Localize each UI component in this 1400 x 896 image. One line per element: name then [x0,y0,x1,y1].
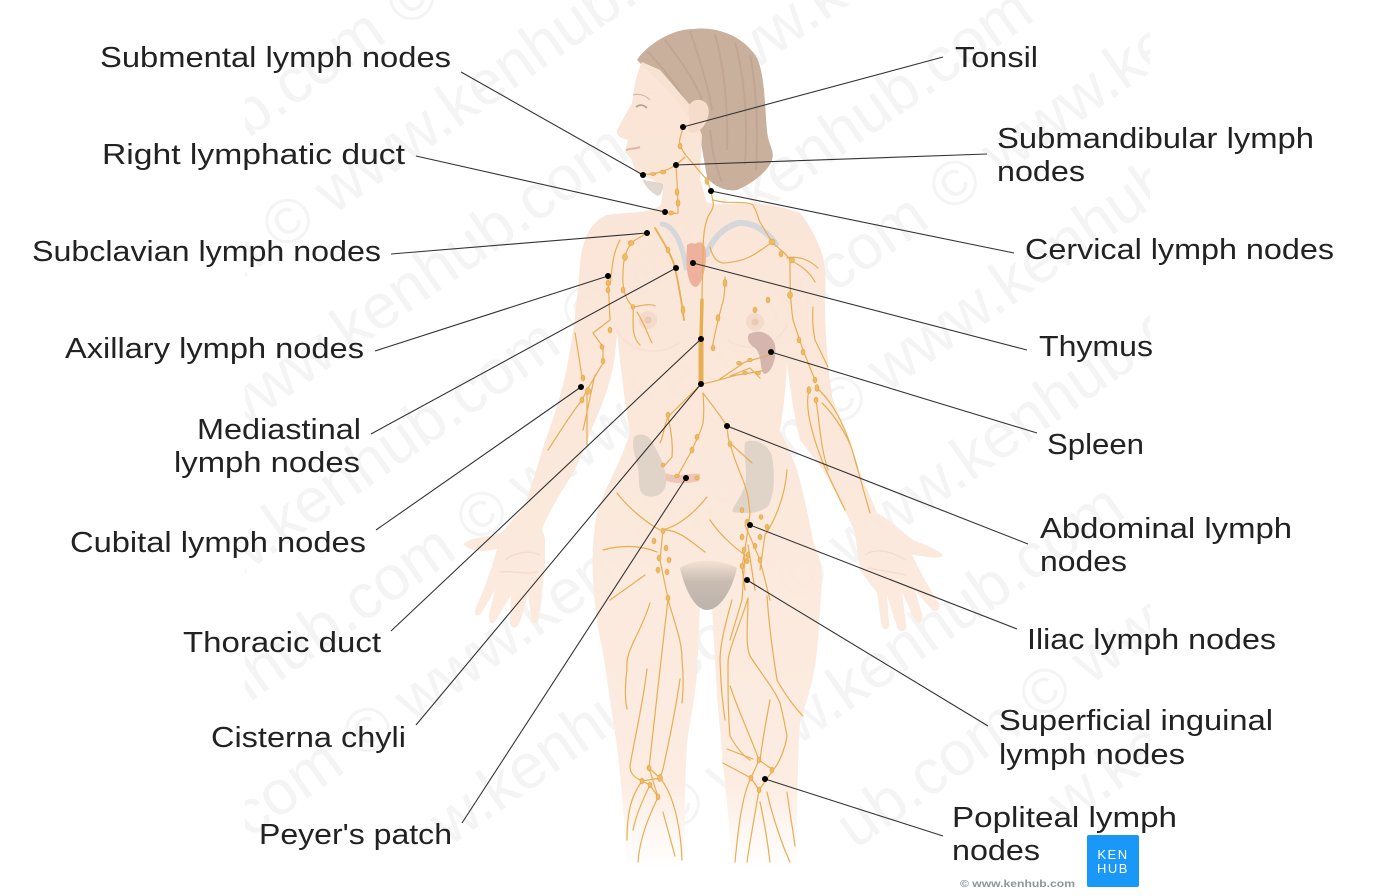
label: abdominal: nodes [1040,546,1127,578]
label: cubital: Cubital lymph nodes [70,527,366,559]
large intestine right [732,441,774,513]
watermark: © www.kenhub.com [639,469,1136,846]
label: abdominal: Abdominal lymph [1040,513,1292,545]
label: cisterna chyli: Cisterna chyli [211,722,406,754]
label: mediastinal: lymph nodes [174,447,360,479]
body silhouette [463,62,943,866]
watermark: © www.kenhub.com [143,110,640,487]
watermark [245,0,1150,852]
label: axillary: Axillary lymph nodes [65,333,364,365]
logo: Kenhub: KEN [1097,847,1129,862]
ear [688,100,709,133]
label: mediastinal: Mediastinal [197,414,361,446]
spleen [748,332,775,374]
label: cervical: Cervical lymph nodes [1025,234,1334,266]
label: thoracic duct: Thoracic duct [183,627,381,659]
lymph nodes [580,143,819,800]
label: popliteal: nodes [952,835,1040,867]
label: right lymphatic duct: Right lymphatic duct [102,139,405,171]
label: submental: Submental lymph nodes [100,42,451,74]
watermark: w.ken [1034,688,1207,838]
watermark: .com [203,725,355,860]
facial features [626,94,650,150]
label: spleen: Spleen [1047,429,1144,461]
label: Peyer's patch: Peyer's patch [259,819,452,851]
logo: Kenhub [1087,835,1139,887]
label: superficial inguinal: Superficial inguinal [999,705,1273,737]
leader end dots [578,124,774,782]
label: subclavian: Subclavian lymph nodes [32,236,381,268]
watermark: © www.ken [1006,495,1305,733]
pubic hair [680,560,737,610]
hand creases [500,551,906,575]
Peyer's patch [665,473,700,483]
leader lines [371,57,1037,836]
watermark: w.kenhub.com [416,570,787,859]
watermark: hub.com [37,216,275,411]
breasts [617,311,787,351]
copyright: © www.kenhub.com [960,879,1075,890]
watermark: © www.kenhub.com [763,239,1260,616]
large intestine left [633,434,666,497]
label: superficial inguinal [999,705,1273,771]
label: popliteal: Popliteal lymph [952,802,1177,834]
watermark: w.kenhub.com [96,510,467,799]
anatomical figure [463,29,943,866]
watermark: © www.kenhub.com [802,64,1299,441]
label: mediastinal [174,414,361,479]
lymph vessels [548,128,870,862]
label: superficial inguinal: lymph nodes [999,739,1185,771]
hair [637,29,773,190]
label: popliteal [952,802,1177,867]
watermark: © www.kenhub.com [75,304,572,681]
subclavian veins [662,223,776,268]
watermark: ub.com [823,686,1032,861]
label: tonsil: Tonsil [955,42,1038,74]
logo: Kenhub: HUB [1097,861,1129,876]
labels: right column [952,42,1334,867]
label: thymus: Thymus [1039,331,1153,363]
watermark: © www.kenhub.com [329,395,826,772]
labels: left column [32,42,452,851]
label: submandibular: Submandibular lymph [997,123,1314,155]
watermark: © www.kenhub.com [443,179,940,556]
label: submandibular [997,123,1314,188]
neck hair [642,179,663,196]
label: submandibular: nodes [997,156,1085,188]
label: iliac: Iliac lymph nodes [1027,624,1276,656]
label: abdominal [1040,513,1292,578]
thymus [686,242,706,287]
